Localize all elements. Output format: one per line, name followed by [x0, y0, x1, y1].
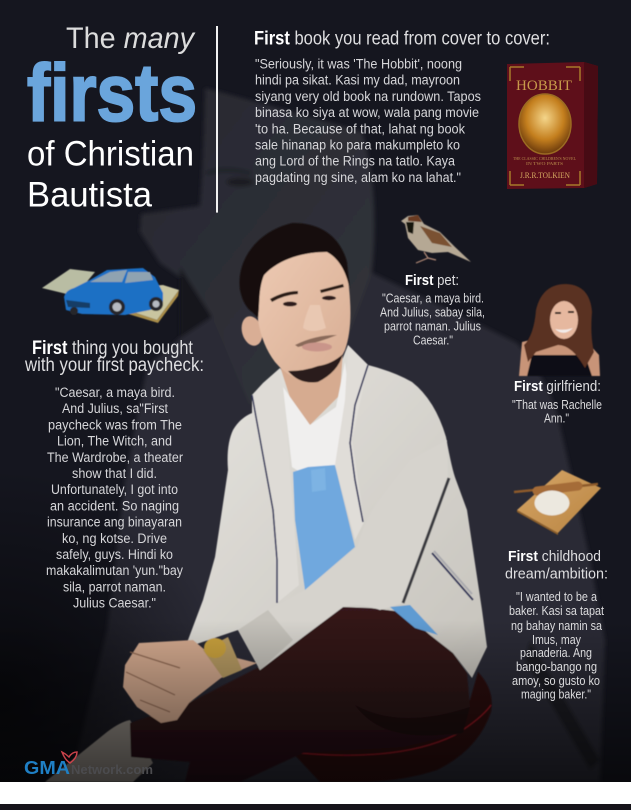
heading: first book: First book you read from cover to cover: [254, 29, 550, 50]
quote: first paycheck: ko, ng kotse. Drive [62, 531, 167, 546]
title: firsts [27, 49, 197, 139]
quote: first paycheck: insurance ang binayaran [47, 515, 182, 530]
quote: first book: ang Lord of the Rings na tatlo. Kaya [255, 154, 455, 169]
quote: first paycheck: sila, parrot naman. [63, 579, 166, 594]
heading: first childhood dream: First childhood [508, 548, 601, 565]
logo: GMA Network: GMA [24, 758, 70, 778]
right jacket panel and zipper [335, 345, 368, 540]
quote: first paycheck [46, 385, 183, 611]
lips [302, 342, 332, 352]
icon: maya bird [401, 215, 471, 263]
quote: first book: siyang very old book na rundown. Tapos [255, 89, 481, 104]
bottom darkening [0, 620, 631, 782]
quote: first book: sale hinanap ko para makumpleto ko [255, 138, 460, 152]
quote: first paycheck: And Julius, sa"First [62, 401, 168, 416]
heading: first childhood dream: dream/ambition: [505, 566, 608, 583]
eyes [283, 302, 297, 306]
left jacket panel and zipper [252, 370, 299, 603]
quote: first book [255, 56, 481, 185]
ghost portrait background [44, 88, 605, 782]
quote: first pet: "Caesar, a maya bird. [382, 292, 484, 306]
heading: first pet: First pet: [405, 272, 459, 289]
icon: hobbit book: HOBBIT [516, 78, 572, 94]
photo: girlfriend portrait [519, 284, 600, 376]
icon: car on cash [42, 268, 179, 323]
quote: first book: hindi pa sikat. Kasi my dad, mayroon [255, 73, 460, 88]
beard [288, 354, 343, 383]
blue shirt panel [293, 465, 355, 590]
quote: first pet: And Julius, sabay sila, [380, 306, 485, 320]
forearm sleeve [238, 440, 448, 670]
pocket zipper [432, 553, 473, 600]
panel: first paycheck [24, 268, 204, 611]
quote: first paycheck: Lion, The Witch, and [57, 434, 172, 449]
title [27, 22, 197, 215]
quote: first pet: parrot naman. Julius [384, 320, 481, 334]
face [258, 252, 350, 383]
white shirt [283, 362, 352, 472]
quote: first girlfriend: Ann." [544, 412, 569, 426]
shoe [45, 720, 153, 782]
icon: rolling pin and dough [514, 470, 601, 535]
quote: first paycheck: show that I did. [72, 466, 157, 481]
icon: hobbit book [507, 62, 598, 189]
ear [238, 314, 266, 348]
quote: first book: pagdating ng sine, alam ko na lahat." [255, 170, 461, 185]
quote: first paycheck: an accident. So naging [50, 498, 179, 513]
logo: GMA Network: Network.com [71, 762, 153, 777]
quote: first girlfriend: "That was Rachelle [512, 398, 602, 412]
quote: first paycheck: The Wardrobe, a theater [47, 450, 183, 465]
quote: first paycheck: Unfortunately, I got into [51, 482, 178, 497]
quote: first girlfriend [512, 398, 602, 426]
quote: first childhood dream: maging baker." [521, 688, 591, 702]
eyebrows [270, 284, 344, 302]
quote: first paycheck: makakalimutan 'yun."bay [46, 563, 183, 578]
jacket body [185, 345, 487, 678]
title: The many [66, 22, 196, 55]
quote: first childhood dream: amoy, so gusto ko [512, 674, 600, 688]
quote: first childhood dream: "I wanted to be a [516, 590, 597, 604]
main photo: seated man [45, 223, 492, 782]
heading: first paycheck [24, 338, 204, 376]
white footer band [0, 782, 631, 804]
quote: first paycheck: "Caesar, a maya bird. [55, 385, 175, 400]
quote: first book: binasa ko siya at wow, wala pang movie [255, 105, 479, 120]
lower left vignette [0, 470, 230, 782]
quote: first childhood dream [509, 590, 604, 702]
panel: first book [254, 29, 598, 189]
wrist watch [203, 637, 242, 678]
panel: first girlfriend [512, 284, 602, 426]
hair [239, 223, 350, 318]
title: Bautista [27, 176, 153, 215]
quote: first childhood dream: Imus, may [532, 633, 582, 647]
title divider [216, 26, 218, 213]
quote: first pet: Caesar." [413, 334, 453, 348]
quote: first book: 'to ha. Because of that, lahat ng book [255, 121, 465, 136]
icon: hobbit book: THE CLASSIC CHILDREN'S NOVEL [513, 156, 577, 161]
bottom dark strip [0, 804, 631, 810]
quote: first paycheck: safely, guys. Hindi ko [56, 547, 173, 562]
quote: first childhood dream: ng bahay namin sa [511, 619, 602, 633]
icon: hobbit book: J.R.R.TOLKIEN [520, 170, 570, 180]
trousers [130, 605, 470, 782]
logo: GMA Network [24, 752, 153, 778]
panel: first childhood dream [505, 470, 608, 702]
title: of Christian [27, 135, 194, 174]
quote: first paycheck: Julius Caesar." [73, 596, 156, 611]
stool [290, 672, 492, 782]
quote: first childhood dream: bango-bango ng [516, 660, 597, 674]
heading: first girlfriend: First girlfriend: [514, 378, 601, 395]
nose [303, 305, 326, 331]
quote: first paycheck: paycheck was from The [48, 417, 182, 432]
heading: first paycheck: First thing you bought [32, 338, 194, 359]
panel: first pet [380, 215, 485, 348]
heading: first paycheck: with your first paycheck: [24, 355, 204, 376]
hands [123, 640, 257, 723]
quote: first childhood dream: panaderia. Ang [520, 646, 592, 660]
heading: first childhood dream [505, 548, 608, 583]
quote: first pet [380, 292, 485, 348]
neck [278, 350, 343, 425]
moustache [295, 335, 337, 347]
quote: first childhood dream: baker. Kasi sa tapat [509, 604, 604, 618]
lower blue hem [390, 605, 438, 635]
icon: hobbit book: IN TWO PARTS [526, 161, 563, 166]
quote: first book: "Seriously, it was 'The Hobbit', noong [255, 56, 462, 72]
